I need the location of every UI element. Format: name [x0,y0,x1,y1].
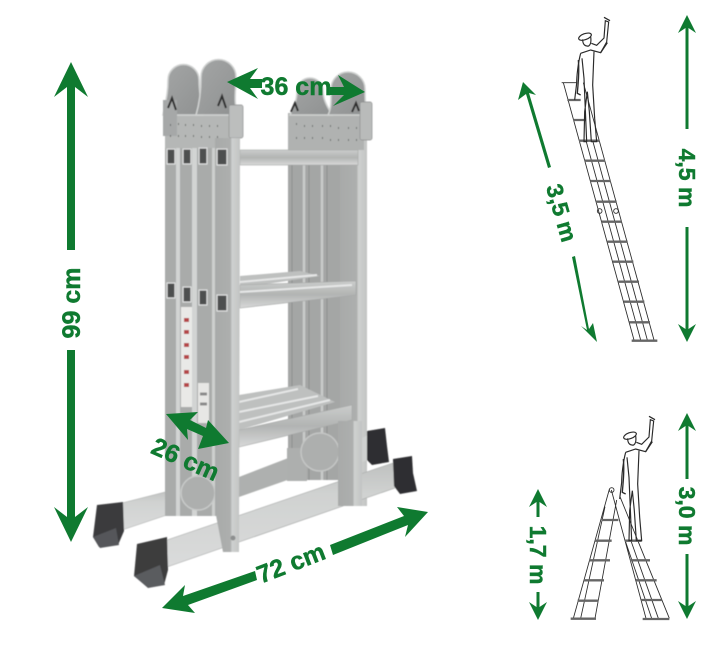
lower hinge plate, back [301,433,339,471]
safety labels [181,307,209,423]
arrow: reach 4,5 m [674,15,700,342]
front post cap [229,105,243,138]
arrow: width 36 cm: 36 cm [261,73,331,101]
front post [215,138,240,552]
back foot caps [93,428,389,548]
worker figure [575,17,610,142]
arrow: height 1,7 m: 1,7 m [525,526,551,584]
lower hinge plate, front [181,476,215,510]
arrow: reach 3,0 m: 3,0 m [674,487,700,545]
right post lower [338,421,362,506]
arrow: height 1,7 m [525,489,551,620]
bolts [230,536,236,540]
A-frame ladder [571,488,669,619]
back foot bar [122,435,368,530]
front foot bar [167,463,395,567]
photo: folding aluminium ladder [93,60,417,588]
arrow: reach 3,0 m [674,413,700,619]
arrow: height 99 cm [54,62,88,542]
rail slots [167,148,227,311]
arrow: height 99 cm: 99 cm [58,268,86,338]
arrow: base width 72 cm [162,507,428,613]
arrow: base width 72 cm: 72 cm [253,538,329,589]
diagram: A-frame ladder with worker [571,416,669,619]
arrow: width 36 cm [227,68,365,106]
arrow: ladder length 3,5 m [518,82,597,342]
arrow: depth 26 cm: 26 cm [147,432,223,487]
leaning ladder [562,83,657,341]
front ladder panel [163,60,238,516]
bottom rung [239,385,352,447]
diagram: leaning ladder with worker [562,17,657,341]
worker figure [620,416,655,541]
arrow: reach 4,5 m: 4,5 m [674,149,700,207]
arrow: ladder length 3,5 m: 3,5 m [541,181,582,245]
top rung [240,150,358,165]
arrow: depth 26 cm [147,412,229,487]
back ladder section [288,72,372,506]
middle rung [240,271,356,308]
front foot caps [134,456,417,588]
